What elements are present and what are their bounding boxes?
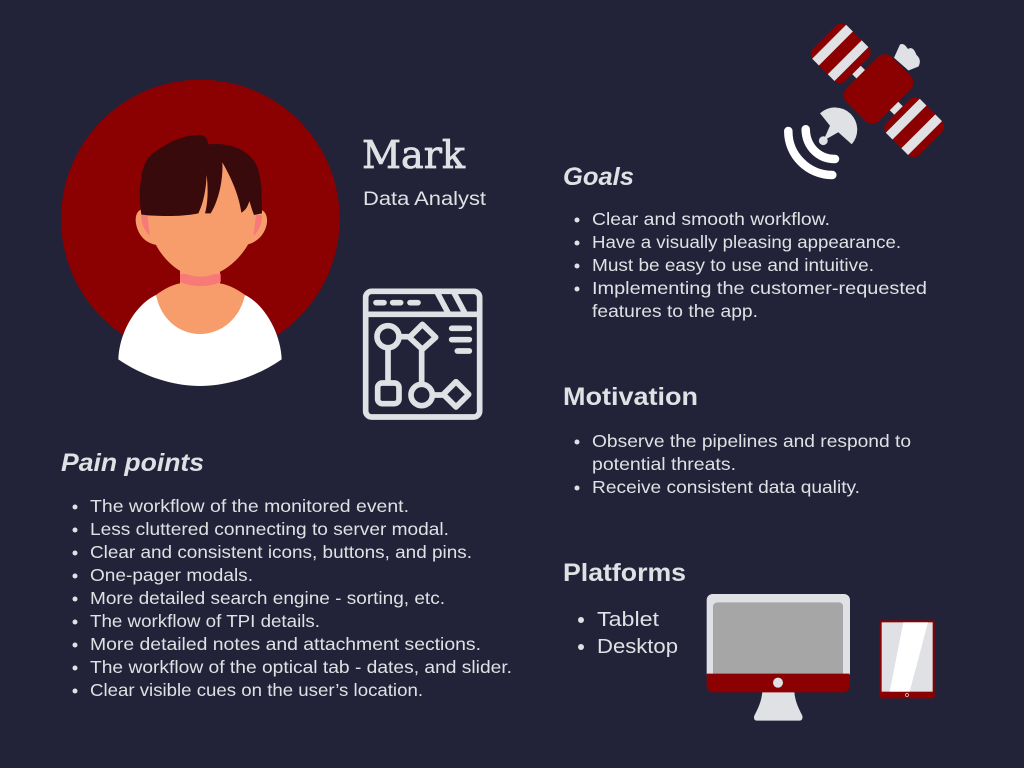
icon: workflow window	[366, 291, 480, 417]
ear shading	[141, 215, 262, 236]
name: Mark: Mark	[362, 133, 466, 177]
neck shadow	[180, 274, 221, 286]
list: motivation: Receive consistent data quality.	[592, 477, 860, 497]
list: pain points: More detailed search engine - sorting, etc.	[90, 588, 445, 608]
icon: satellite	[788, 20, 948, 175]
heading: Motivation: Motivation	[563, 383, 698, 411]
tablet glare	[890, 622, 928, 692]
avatar background circle	[61, 80, 340, 358]
role: Data Analyst: Data Analyst	[363, 188, 487, 210]
list: platforms: Tablet	[597, 609, 660, 631]
list: goals: Implementing the customer-requested	[592, 278, 927, 298]
list: pain points: Clear visible cues on the user’s location.	[90, 680, 423, 700]
list: platforms: Desktop	[597, 636, 678, 658]
tablet body	[879, 620, 935, 698]
heading: Goals: Goals	[563, 163, 634, 191]
icon: desktop monitor	[707, 594, 850, 721]
shirt	[118, 283, 282, 386]
list: goals: features to the app.	[592, 301, 758, 321]
signal waves	[788, 129, 835, 175]
list: pain points: Clear and consistent icons, buttons, and pins.	[90, 542, 472, 562]
satellite solar panel upper	[807, 20, 874, 87]
list: pain points	[72, 496, 512, 700]
list: pain points: The workflow of the monitored event.	[90, 496, 409, 516]
list: goals	[574, 209, 927, 321]
monitor stand	[754, 692, 803, 721]
satellite connectors	[851, 65, 903, 115]
list: pain points: More detailed notes and attachment sections.	[90, 634, 481, 654]
monitor frame	[707, 594, 850, 675]
monitor button	[773, 678, 783, 688]
heading: Pain points: Pain points	[61, 449, 204, 477]
list: motivation: Observe the pipelines and respond to	[592, 431, 911, 451]
hair	[140, 135, 262, 216]
satellite sensor	[894, 44, 920, 70]
icon: tablet	[879, 620, 935, 698]
avatar: man portrait	[61, 80, 340, 386]
heading: Platforms: Platforms	[563, 559, 686, 587]
list: platforms	[578, 609, 678, 658]
monitor base bar	[707, 674, 850, 692]
neck and chest	[156, 267, 245, 334]
face	[147, 157, 256, 277]
monitor screen	[713, 602, 843, 675]
satellite dish	[820, 107, 857, 144]
list: pain points: The workflow of the optical tab - dates, and slider.	[90, 657, 512, 677]
list: motivation: potential threats.	[592, 454, 736, 474]
ears	[136, 209, 267, 245]
list: pain points: The workflow of TPI details.	[90, 611, 320, 631]
list: pain points: Less cluttered connecting to server modal.	[90, 519, 449, 539]
list: goals: Must be easy to use and intuitive.	[592, 255, 874, 275]
satellite body	[840, 50, 917, 128]
list: goals: Clear and smooth workflow.	[592, 209, 830, 229]
list: pain points: One-pager modals.	[90, 565, 253, 585]
tablet home button	[905, 693, 908, 696]
list: motivation	[574, 431, 911, 497]
list: goals: Have a visually pleasing appearance.	[592, 232, 901, 252]
satellite solar panel lower	[881, 94, 948, 161]
tablet screen	[882, 622, 933, 692]
